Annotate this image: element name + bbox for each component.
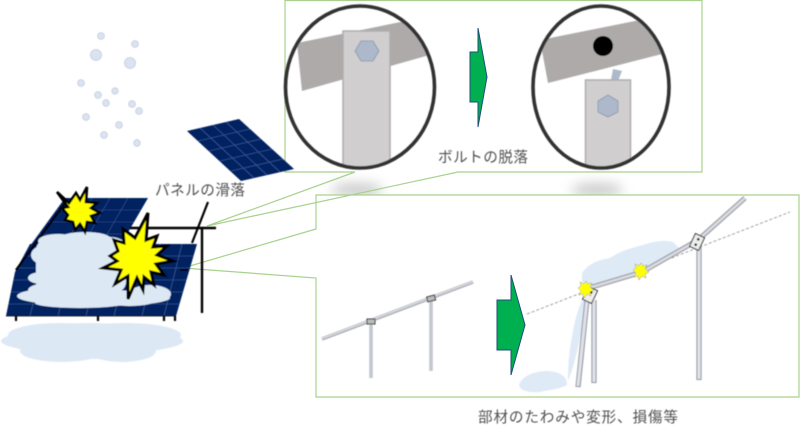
dashed reference line (527, 212, 790, 314)
snow pile (519, 371, 567, 392)
arrow: small green (470, 28, 487, 127)
upper solar panel (30, 198, 150, 250)
ground snow (1, 323, 183, 362)
icon: impact star small (57, 187, 100, 232)
frame after: deformed structure (519, 198, 790, 392)
lower solar panel (0, 244, 200, 316)
callout shadows (331, 183, 623, 197)
panel: member deformation callout (183, 195, 799, 426)
label: bolt detachment: ボルトの脱落 (438, 149, 528, 166)
arrow: large green (497, 275, 525, 375)
icon: damage spark 2 (633, 263, 649, 280)
icon: sliding solar panel (187, 119, 294, 181)
snow streak down post (568, 300, 588, 381)
detail before: bolt in place (286, 6, 440, 171)
icon: impact star large (103, 213, 173, 299)
support frame (6, 202, 216, 321)
joints (690, 234, 704, 250)
frame before: intact structure (322, 282, 473, 378)
panel: bolt detachment callout (207, 0, 702, 226)
callout frame (207, 0, 702, 226)
bent beam (592, 198, 745, 287)
main illustration: snow-covered solar array (0, 187, 216, 362)
posts (578, 247, 699, 387)
snow on deformed beam (582, 241, 679, 287)
callout frame (183, 195, 799, 397)
label: member deformation: 部材のたわみや変形、損傷等 (478, 408, 678, 426)
falling snow particles (78, 33, 142, 146)
label: panel sliding: パネルの滑落 (155, 182, 245, 199)
snow on panels (17, 232, 171, 308)
icon: damage spark 1 (578, 281, 594, 298)
detail after: bolt missing (533, 6, 670, 172)
